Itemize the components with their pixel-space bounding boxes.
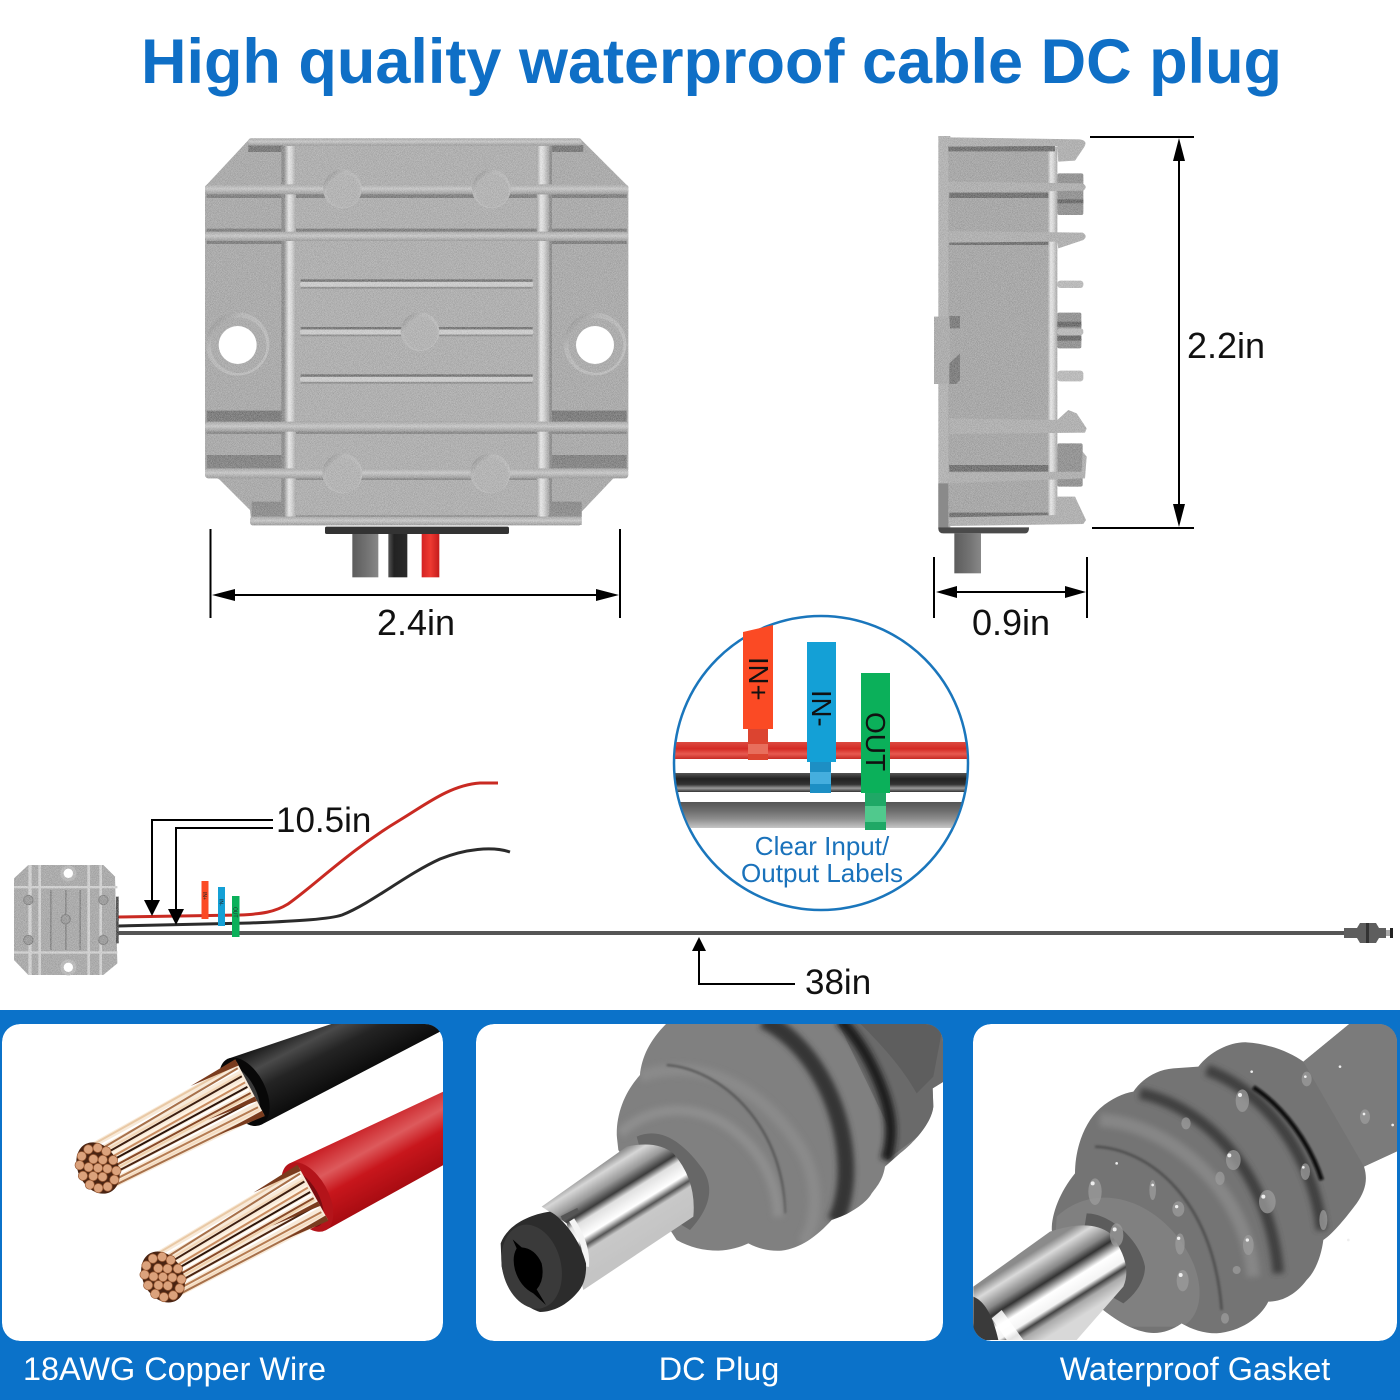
- device: front view: [205, 138, 628, 577]
- dimension: 2.2in: [1090, 137, 1265, 528]
- tag: IN+: [743, 625, 774, 760]
- bottom blue band: [0, 1010, 1400, 1400]
- caption: 18AWG Copper Wire: 18AWG Copper Wire: [23, 1351, 326, 1387]
- left bump: [934, 317, 950, 384]
- callout caption: Clear Input/: [755, 831, 890, 861]
- illustration: gasket with droplets: [973, 1020, 1400, 1340]
- ribs: [300, 282, 533, 382]
- cable length diagram: [14, 783, 1393, 1002]
- callout circle: clear input/output labels: [670, 616, 972, 910]
- tag: OUT: OUT: [860, 712, 891, 771]
- tip: [501, 1212, 586, 1312]
- illustration: black wire: [74, 1024, 440, 1194]
- mini converter: [14, 865, 119, 975]
- knobs: [322, 170, 511, 493]
- fins: [948, 146, 1055, 517]
- right studs: [1057, 173, 1083, 487]
- panel: waterproof gasket: [973, 1020, 1400, 1341]
- caption: Waterproof Gasket: Waterproof Gasket: [1060, 1351, 1330, 1387]
- dimension: 2.4in: 2.4in: [377, 602, 455, 643]
- arrow: 10.5in leaders: [144, 820, 273, 925]
- wire outlets: [325, 527, 509, 534]
- illustration: red wire: [140, 1092, 443, 1302]
- label: 38in: 38in: [805, 963, 871, 1002]
- illustration: plug: [493, 1020, 953, 1315]
- wires in callout: [670, 742, 972, 828]
- tag: IN+: IN+: [743, 657, 774, 701]
- callout caption: Output Labels: [741, 858, 903, 888]
- tag: IN-: [806, 642, 837, 793]
- front view of converter with dimension: [205, 138, 628, 643]
- cable: gray main wire with DC plug: [117, 923, 1393, 943]
- title: High quality waterproof cable DC plug: [141, 27, 1282, 97]
- mini tags: IN-: [218, 899, 224, 906]
- dimension: 0.9in: [934, 557, 1087, 643]
- panel: copper wire: [2, 1024, 443, 1341]
- dimension: 0.9in: 0.9in: [972, 602, 1050, 643]
- panel: DC plug: [476, 1020, 953, 1341]
- mini tags: OUT: [232, 907, 238, 918]
- mini tags: IN+: [201, 892, 207, 900]
- fins: [248, 138, 582, 146]
- label: 10.5in: 10.5in: [276, 801, 371, 840]
- mounting ears: [206, 312, 626, 376]
- caption: DC Plug: DC Plug: [659, 1351, 779, 1387]
- dimension: 2.4in: [210, 529, 620, 643]
- side view of converter with dimensions: [934, 136, 1265, 643]
- barrel: [973, 1225, 1126, 1340]
- droplets: [1088, 1072, 1370, 1324]
- mini tags: [201, 881, 240, 937]
- vertical highlights: [285, 146, 296, 517]
- arrow: 38in leader: [692, 937, 795, 984]
- shadow pockets: [248, 145, 583, 152]
- cable: red wire: [118, 783, 498, 917]
- cable: black wire: [118, 849, 510, 926]
- barrel: [542, 1144, 694, 1290]
- dimension: 2.2in: 2.2in: [1187, 325, 1265, 366]
- tag: IN-: IN-: [806, 690, 837, 727]
- device: side view: [934, 136, 1087, 573]
- tag: OUT: [860, 673, 891, 830]
